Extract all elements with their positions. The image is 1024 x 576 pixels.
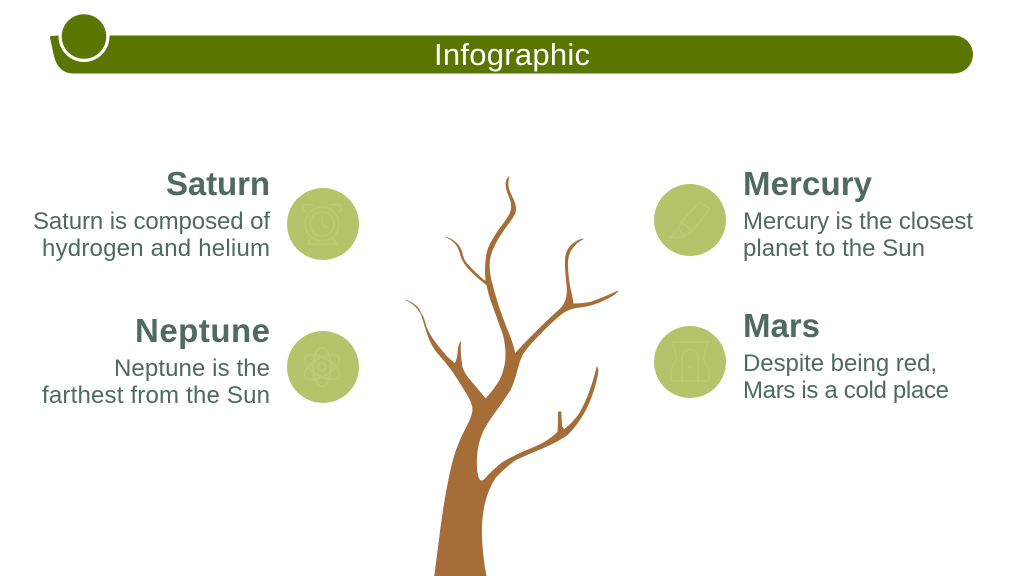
heading: Mercury: Mercury (743, 165, 873, 202)
heading: Neptune: Neptune (135, 312, 270, 349)
heading: Mars: Mars (743, 307, 820, 344)
icon: atom (287, 331, 359, 403)
text: Neptune description (42, 355, 270, 409)
panel: Mercury (654, 165, 973, 262)
text: Mars description: Mars is a cold place (743, 377, 949, 404)
text: Saturn description: hydrogen and helium (42, 235, 270, 262)
tree illustration (406, 177, 618, 576)
text: Mars description: Despite being red, (743, 350, 937, 377)
text: Mercury description: planet to the Sun (743, 235, 925, 262)
text: Neptune description: Neptune is the (114, 355, 270, 382)
title: Infographic (434, 37, 590, 72)
text: Mercury description: Mercury is the closest (743, 208, 973, 235)
heading: Saturn: Saturn (166, 165, 270, 202)
text: Mercury description (743, 208, 973, 262)
text: Neptune description: farthest from the Sun (42, 382, 270, 409)
header ring (58, 11, 110, 62)
panel: Saturn (33, 165, 359, 262)
header circle (62, 14, 106, 59)
icon: pencil sharpener (654, 326, 726, 398)
icon: alarm clock (287, 188, 359, 260)
text: Saturn description: Saturn is composed of (33, 208, 270, 235)
panel: Neptune (42, 312, 359, 409)
text: Saturn description (33, 208, 270, 262)
header bar (50, 36, 973, 74)
icon: highlighter (654, 184, 726, 256)
panel: Mars (654, 307, 949, 404)
header banner (50, 11, 973, 74)
text: Mars description (743, 350, 949, 404)
